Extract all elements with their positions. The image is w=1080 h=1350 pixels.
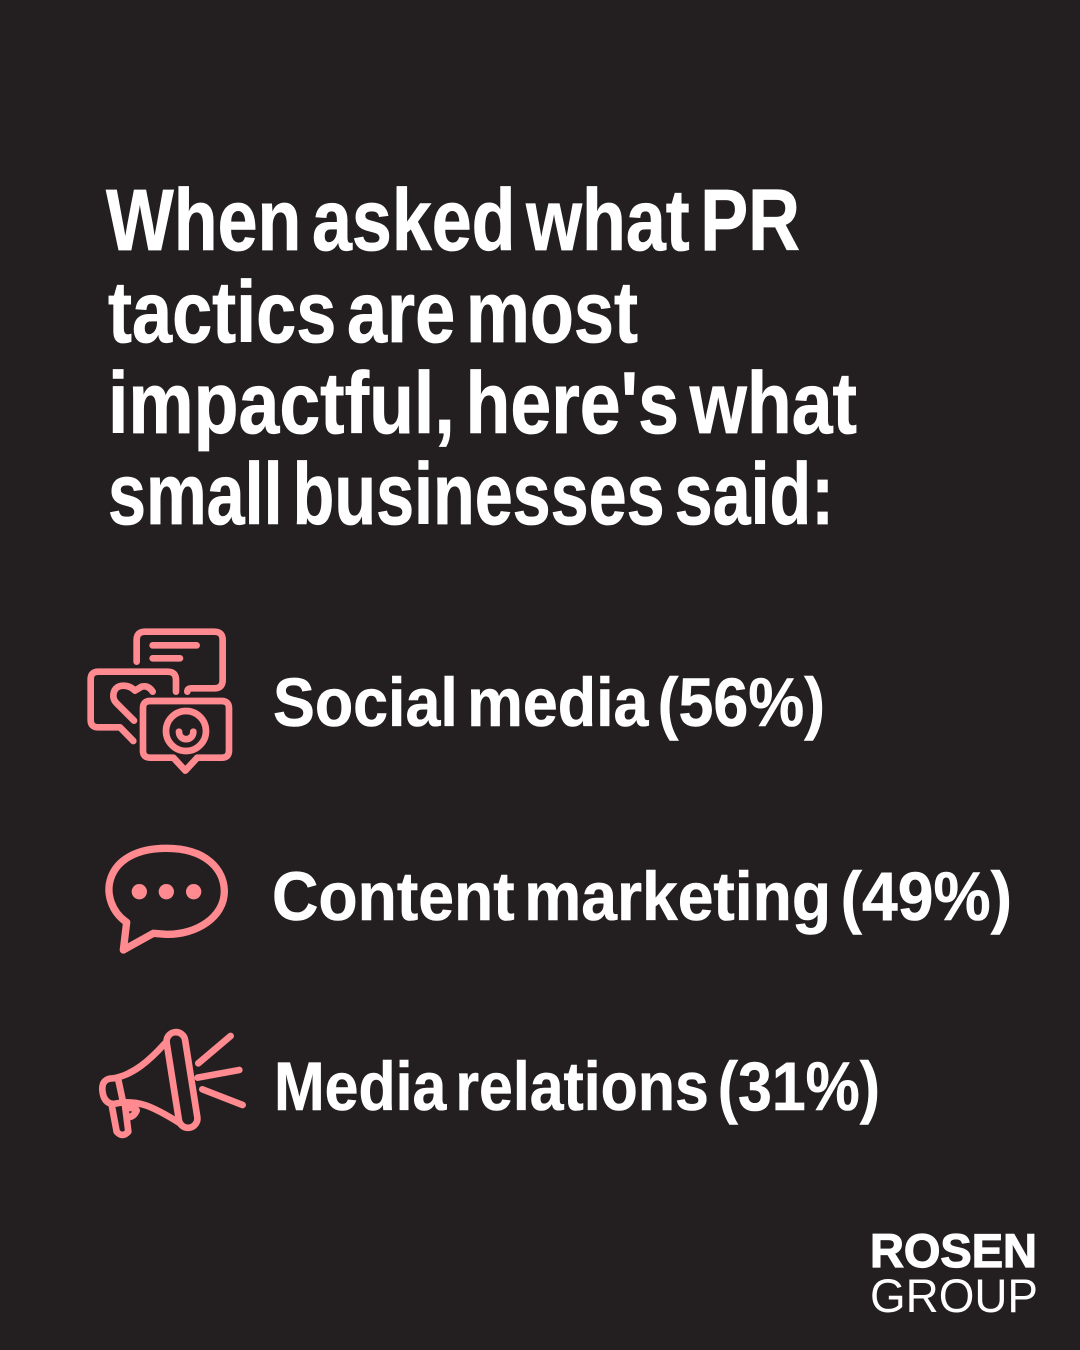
title: When asked what PR	[106, 172, 800, 269]
icon: social media chat bubbles	[91, 632, 229, 771]
title	[106, 172, 857, 543]
logo: Rosen Group	[870, 1224, 1038, 1322]
icon: speech bubble	[109, 848, 224, 950]
label: content marketing: Content marketing (49%)	[272, 858, 1012, 935]
title: small businesses said:	[108, 446, 834, 543]
title: impactful, here's what	[108, 355, 857, 452]
label: media relations: Media relations (31%)	[274, 1048, 880, 1125]
label: social media: Social media (56%)	[273, 664, 825, 741]
logo: Rosen Group: ROSEN	[870, 1224, 1037, 1277]
logo: Rosen Group: GROUP	[870, 1269, 1038, 1322]
title: tactics are most	[108, 264, 638, 361]
icon: megaphone	[102, 1031, 243, 1135]
